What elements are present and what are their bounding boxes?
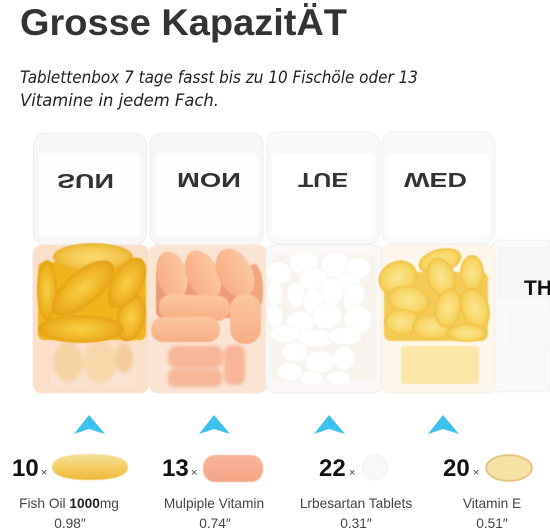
item: fish oil: × — [41, 467, 47, 479]
item: fish oil — [12, 454, 128, 529]
blue arrow 2 — [199, 415, 230, 434]
title: Grosse KapazitÄT — [20, 2, 347, 43]
lid: TUE: TUE — [298, 168, 348, 190]
lid: WED: WED — [404, 168, 467, 190]
tray: TUE with white tablets — [266, 245, 382, 393]
item: irbesartan tablets: × — [349, 467, 355, 479]
lid: MON — [150, 133, 263, 245]
blue arrow 4 — [428, 415, 459, 434]
item: fish oil: Fish Oil 1000mg — [19, 496, 119, 511]
subtitle: Tablettenbox 7 tage fasst bis zu 10 Fischöle oder 13 — [20, 68, 418, 87]
item: multiple vitamin: Mulpiple Vitamin — [164, 496, 264, 511]
tray: WED with vitamin E — [373, 244, 495, 393]
item: vitamin E: × — [473, 467, 479, 479]
lid: MON: MON — [177, 168, 241, 190]
item: irbesartan tablets: Lrbesartan Tablets — [300, 496, 412, 511]
lid: SUN — [34, 133, 146, 245]
item: vitamin E — [443, 455, 532, 529]
subtitle — [20, 68, 418, 110]
item: vitamin E: Vitamin E — [463, 496, 521, 511]
item: fish oil: 10 — [12, 455, 39, 482]
item: irbesartan tablets — [300, 454, 412, 529]
lid: SUN: SUN — [57, 169, 114, 191]
blue arrow 3 — [314, 415, 345, 434]
subtitle: Vitamine in jedem Fach. — [20, 91, 219, 110]
item: multiple vitamin — [162, 455, 264, 529]
tray: SUN with fish oil — [33, 243, 154, 393]
lid: TUE — [267, 132, 380, 244]
item: vitamin E: 20 — [443, 455, 470, 482]
blue arrow 1 — [74, 415, 105, 434]
lid: THU — [492, 240, 550, 392]
pill box lids — [34, 132, 495, 245]
item: irbesartan tablets: 22 — [319, 455, 346, 482]
item: multiple vitamin: × — [191, 467, 197, 479]
lid: WED — [382, 132, 495, 244]
item: multiple vitamin: 13 — [162, 455, 189, 482]
tray: MON with multivitamins — [149, 242, 267, 393]
